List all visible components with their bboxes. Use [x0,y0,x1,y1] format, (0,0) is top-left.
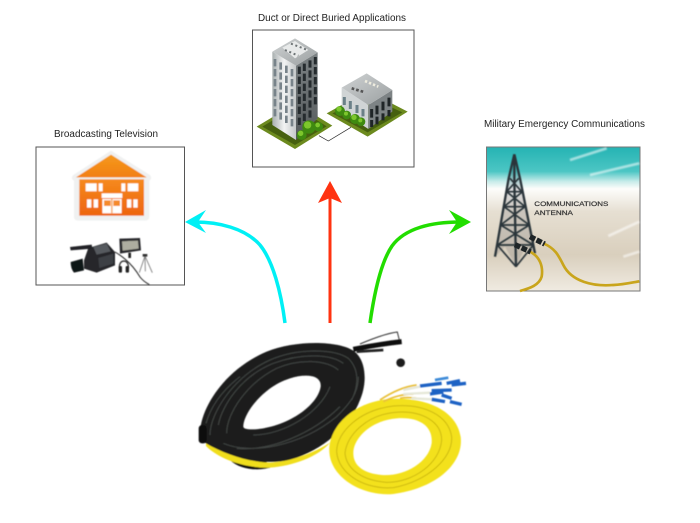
heading: military emergency communications: Military Emergency Communications [484,119,645,130]
buried cable link [319,127,351,141]
coil clamp [199,425,207,443]
cable connectors [515,237,545,252]
panel: broadcasting television [36,129,184,285]
tall building lawn [257,117,332,149]
panel: duct or direct buried applications [252,13,414,167]
icon: video camera and accessories [70,238,152,285]
low building [342,73,392,129]
panel frame [36,147,184,285]
black cable coil [199,332,405,469]
tripod [139,256,152,273]
arrow: green to military [370,210,471,323]
LED light panel [119,238,141,254]
signal waves [570,148,639,257]
illustration: connected buildings [257,38,408,149]
dust cap [396,358,405,367]
black cable connector [353,342,402,349]
small building lawn [327,103,408,137]
camera cable [115,252,149,285]
heading: duct or direct buried applications: Duct or Direct Buried Applications [258,13,406,24]
panel frame [252,30,414,167]
tall building [272,38,318,140]
illustration: communications antenna: ANTENNA [534,210,574,217]
icon: orange house [72,151,151,221]
panel frame and sky backdrop [486,147,640,291]
video camera [84,243,115,273]
yellow antenna cables [543,243,639,285]
arrow: red to buried applications [318,181,342,323]
illustration: communications antenna [495,148,639,291]
panel: military emergency communications [484,119,645,291]
headphones [119,261,128,269]
yellow tail on black coil [206,443,330,468]
green shrubs [297,106,365,140]
heading: broadcasting television: Broadcasting Television [54,129,158,140]
product: fiber optic cable coils [199,332,466,494]
antenna label: COMMUNICATIONS [534,201,609,208]
blue fiber connectors [380,378,466,404]
yellow fiber coil [329,399,461,494]
arrow: cyan to broadcasting [185,210,285,323]
antenna tower [495,154,535,267]
